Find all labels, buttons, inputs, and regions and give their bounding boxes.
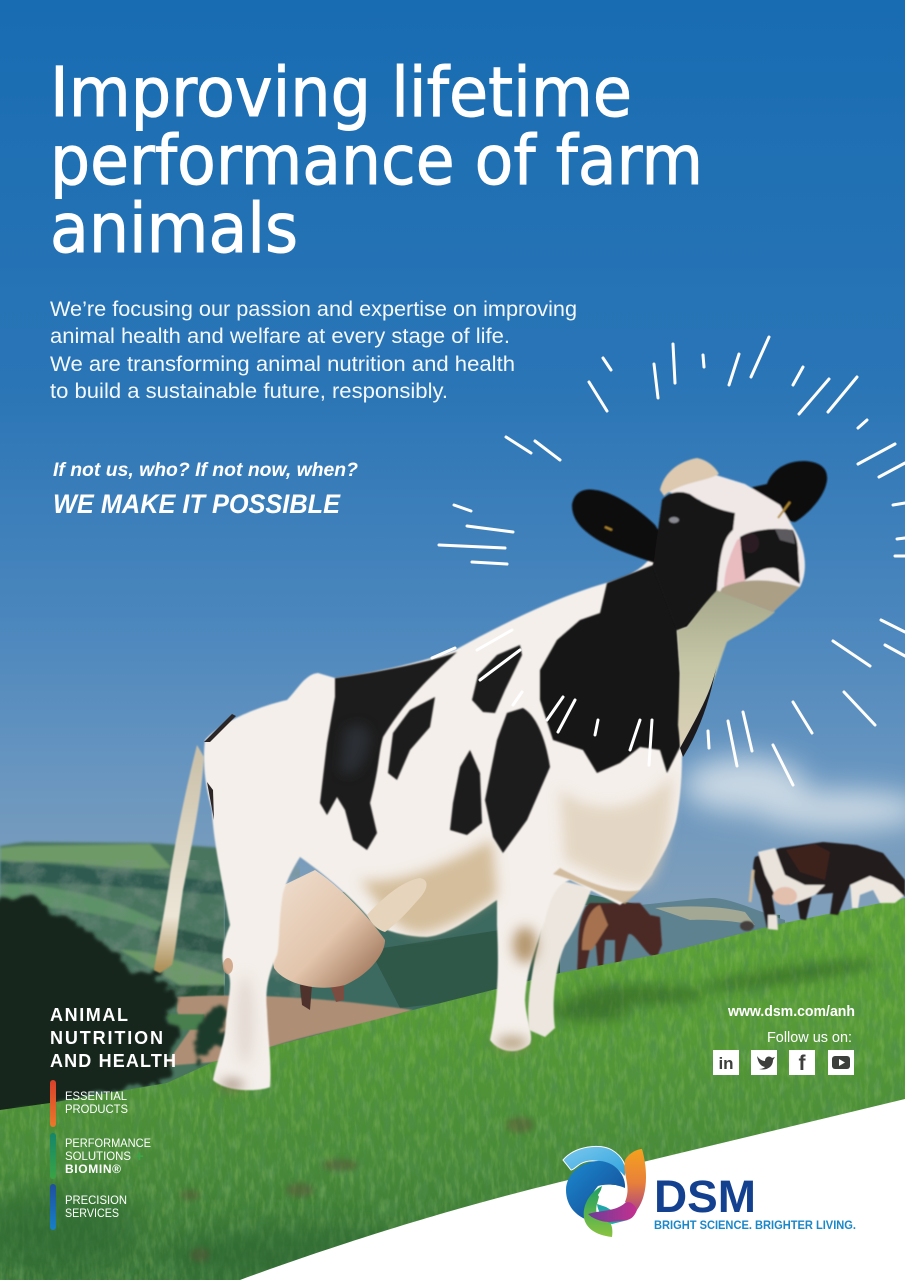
tagline: BRIGHT SCIENCE. BRIGHTER LIVING. [654, 1218, 856, 1232]
centre hills [225, 880, 780, 1060]
DSM logo [563, 1146, 856, 1237]
intro paragraph: We are transforming animal nutrition and health [50, 353, 515, 376]
neck underside stripe [680, 664, 717, 757]
icon: youtube [828, 1050, 854, 1075]
black patch: lower flank [450, 750, 482, 835]
grass hillside [0, 890, 905, 1280]
title [50, 53, 703, 269]
logo mark [563, 1146, 646, 1237]
black patch: shoulder and neck [540, 510, 720, 773]
icon: twitter [751, 1050, 777, 1075]
essential products item: PRODUCTS [65, 1102, 128, 1116]
far front leg [528, 878, 592, 1037]
tiny far animal [740, 921, 754, 931]
division heading: NUTRITION [50, 1028, 163, 1048]
follow us label: Follow us on: [767, 1030, 852, 1046]
icon: linkedin [713, 1050, 739, 1075]
essential products item [50, 1080, 128, 1127]
right distant hills [560, 898, 785, 985]
performance solutions item: PERFORMANCE [65, 1136, 151, 1150]
second far cow [850, 870, 905, 908]
muzzle [740, 529, 800, 584]
slogan: WE MAKE IT POSSIBLE [53, 489, 341, 519]
precision services item [50, 1184, 127, 1230]
hill texture [0, 860, 300, 1012]
black and white cow in far background [740, 842, 905, 931]
intro paragraph: to build a sustainable future, responsibly. [50, 380, 448, 403]
ploughed field [165, 995, 413, 1066]
division heading: AND HEALTH [50, 1051, 176, 1071]
slogan: If not us, who? If not now, when? [53, 460, 358, 481]
precision services item: SERVICES [65, 1206, 119, 1220]
main cow [154, 458, 827, 1090]
eye [669, 517, 679, 523]
icon: facebook: f [798, 1052, 806, 1075]
icon: facebook [789, 1050, 815, 1075]
far cow white patches [758, 848, 825, 905]
DSM wordmark: DSM [654, 1171, 756, 1222]
right ear [740, 461, 827, 522]
black patch: rear [320, 652, 457, 850]
intro paragraph [50, 298, 577, 403]
dark trees [0, 895, 224, 1120]
title: performance of farm [50, 121, 703, 201]
ear tags [605, 502, 790, 530]
forelock [660, 458, 719, 496]
logo centre [598, 1185, 622, 1206]
performance solutions item: SOLUTIONS [65, 1149, 131, 1163]
performance solutions item [50, 1133, 151, 1179]
black patch: flank stripe [388, 697, 435, 780]
udder [273, 870, 385, 1010]
icon: linkedin: in [718, 1054, 734, 1073]
grass shadows [550, 955, 880, 1022]
belly fold [367, 878, 427, 932]
black patch: ribs [485, 708, 550, 853]
precision services item: PRECISION [65, 1193, 127, 1207]
black patch: top [472, 645, 522, 713]
cow head [572, 458, 827, 630]
intro paragraph: animal health and welfare at every stage of life. [50, 325, 510, 348]
body shading [220, 775, 672, 1090]
essential products item: ESSENTIAL [65, 1089, 127, 1103]
division heading [50, 1005, 176, 1071]
social icons [713, 1050, 854, 1075]
cow tail [154, 745, 204, 973]
chin fold [720, 580, 800, 612]
left hills [0, 842, 225, 1120]
division heading: ANIMAL [50, 1005, 128, 1025]
far cow body [753, 842, 905, 930]
clouds [683, 757, 905, 830]
white face [660, 470, 805, 612]
slogan [53, 460, 358, 519]
performance solutions item: BIOMIN® [65, 1162, 121, 1176]
cow body [204, 540, 720, 1090]
white corner panel [240, 1099, 905, 1280]
left ear [572, 490, 668, 563]
brisket edge [553, 868, 640, 904]
knee tan mark [223, 958, 233, 974]
radiating spark lines [432, 337, 905, 785]
intro paragraph: We’re focusing our passion and expertise on improving [50, 298, 577, 321]
pink nose bridge [724, 532, 752, 588]
brown cow in background [577, 903, 662, 974]
title: animals [50, 189, 298, 269]
black face patch [653, 492, 735, 630]
distant hills [0, 842, 785, 1120]
title: Improving lifetime [50, 53, 632, 133]
website link: www.dsm.com/anh [727, 1004, 855, 1020]
performance solutions item: + [135, 1148, 144, 1165]
business list [50, 1080, 151, 1230]
cow throat [677, 588, 775, 757]
nostril [741, 533, 759, 553]
rump edge marks [204, 714, 236, 820]
